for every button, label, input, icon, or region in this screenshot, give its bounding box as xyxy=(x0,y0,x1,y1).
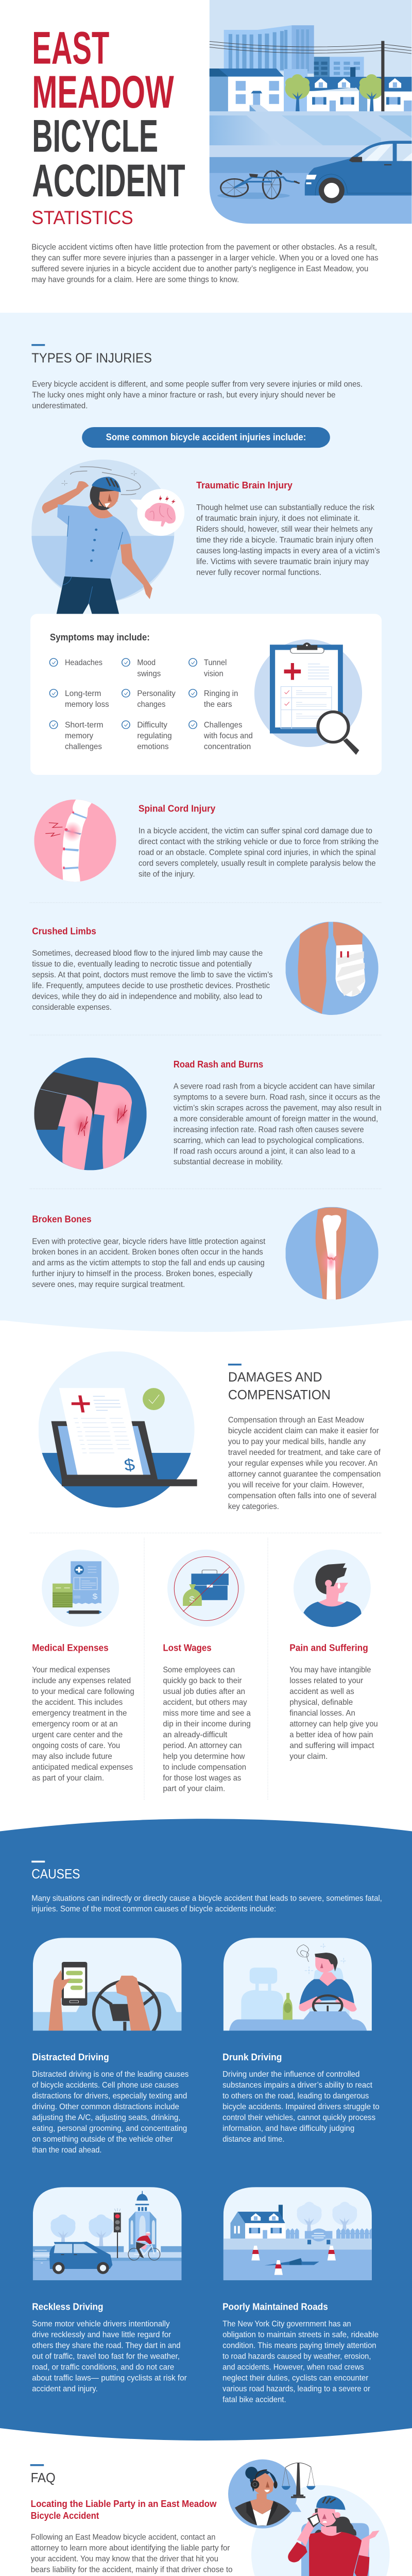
text: traumatic brain injury: Riders should, however, still wear their helmets any xyxy=(196,524,373,534)
text: reckless driving: drive recklessly and have little regard for xyxy=(32,2330,171,2339)
text: lost wages: usual job duties after an xyxy=(163,1687,245,1696)
symptoms list: Ringing in xyxy=(204,689,238,698)
text: lost wages: Lost Wages xyxy=(163,1643,212,1653)
text: broken bones: Even with protective gear, bicycle riders have little protection against xyxy=(32,1236,266,1246)
text: broken bones xyxy=(32,1214,266,1289)
illustration: drunk driving xyxy=(224,1938,372,2030)
text: locating the liable party: your accident. You may know that the driver that hit you xyxy=(31,2554,218,2564)
text: reckless driving: accident and injury. xyxy=(32,2384,98,2393)
illustration: street scene with car and bicycle xyxy=(210,0,411,224)
intro text: causes: injuries. Some of the most common causes of bicycle accidents include: xyxy=(31,1904,276,1913)
text: damages intro: you will receive for your claim. However, xyxy=(228,1480,364,1489)
text: traumatic brain injury: time they ride a bicycle. Traumatic brain injury often xyxy=(196,535,373,545)
text: medical expenses: Medical Expenses xyxy=(32,1643,109,1653)
text: damages intro: Compensation through an East Meadow xyxy=(228,1415,364,1425)
section: compensation categories xyxy=(32,1550,378,1793)
symptoms list: changes xyxy=(137,700,165,709)
text: reckless driving: road, or traffic conditions, and do not care xyxy=(32,2363,174,2371)
text: pain and suffering: your claim. xyxy=(289,1752,328,1761)
text: road rash body: If road rash occurs around a joint, it can also lead to a xyxy=(174,1146,355,1156)
subheading: locating the liable party: Locating the Liable Party in an East Meadow xyxy=(31,2499,217,2510)
text: poorly maintained roads xyxy=(222,2302,379,2404)
text: distracted driving: than the road ahead. xyxy=(32,2145,101,2155)
text: spinal cord injury: site of the injury. xyxy=(139,869,195,878)
text: crushed limbs: Crushed Limbs xyxy=(32,926,96,937)
text: medical expenses: to your medical care following xyxy=(32,1687,134,1696)
illustration: clipboard and magnifier xyxy=(254,639,362,755)
illustration: laptop with medical bill: $ xyxy=(123,1455,136,1475)
text: medical expenses: as part of your claim. xyxy=(32,1773,104,1782)
text: crushed limbs xyxy=(32,926,273,1012)
title: BICYCLE xyxy=(32,111,158,162)
illustration: distracted driving xyxy=(33,1938,181,2031)
text: crushed limbs: considerable expenses. xyxy=(32,1003,112,1012)
section: types of injuries, upper part xyxy=(31,344,380,614)
text: spinal cord injury xyxy=(139,804,379,878)
title xyxy=(32,23,185,206)
text: pain and suffering: and suffering will impact xyxy=(289,1741,374,1750)
text: drunk driving: to others on the road, leading to dangerous xyxy=(222,2091,369,2100)
illustration: cyclist calling attorney xyxy=(228,2460,390,2576)
illustration: laptop with medical bill xyxy=(39,1351,197,1508)
text: distracted driving xyxy=(32,2052,188,2155)
text: road rash body: A severe road rash from a bicycle accident can have similar xyxy=(174,1081,375,1091)
icon: pain and suffering xyxy=(294,1550,371,1627)
heading: causes xyxy=(31,1861,80,1882)
text: lost wages xyxy=(163,1643,251,1793)
section: individual injuries, part 2 xyxy=(32,800,379,1070)
text: spinal cord injury: road or an obstacle. Complete spinal cord injuries, in which the spinal xyxy=(139,848,376,857)
wave: bottom of injuries section xyxy=(0,1319,411,1332)
text: broken bones: and arms as the victim attempts to stop the fall and ends up causing xyxy=(32,1258,265,1267)
heading: types of injuries xyxy=(31,344,152,365)
text: traumatic brain injury: of traumatic brain injury, it does not eliminate it. xyxy=(196,514,360,523)
text: traumatic brain injury: causes long-lasting impacts in every area of a victim’s xyxy=(196,546,380,555)
heading: causes: CAUSES xyxy=(31,1867,80,1882)
text: drunk driving: distance and time. xyxy=(222,2134,285,2144)
text: medical expenses: may also include future xyxy=(32,1752,112,1761)
icon: scales of justice xyxy=(282,2463,316,2498)
text: crushed limbs: sepsis. At that point, doctors must remove the limb to save the victim’s xyxy=(32,970,273,979)
subheading: locating the liable party: Bicycle Accident xyxy=(31,2511,99,2521)
dotted dividers xyxy=(30,903,382,1800)
text: traumatic brain injury: life. Victims with severe traumatic brain injury may xyxy=(196,557,369,566)
text: medical expenses: Your medical expenses xyxy=(32,1665,110,1674)
text: medical expenses: ongoing costs of care. You xyxy=(32,1741,120,1750)
text: lost wages: for those lost wages as xyxy=(163,1773,241,1782)
text: distracted driving: Distracted driving is one of the leading causes xyxy=(32,2070,188,2079)
text: locating the liable party: bears liability for the accident, mainly if that driver chose to xyxy=(31,2566,233,2574)
text: locating the liable party: Following an East Meadow bicycle accident, contact an xyxy=(31,2533,215,2542)
section: causes, lower xyxy=(30,2187,379,2521)
section: individual injuries, part 3 xyxy=(0,1058,411,1511)
text: medical expenses: emergency treatment in the xyxy=(32,1708,127,1718)
text: pain and suffering: losses related to your xyxy=(289,1676,363,1685)
heading: types of injuries: TYPES OF INJURIES xyxy=(31,350,152,365)
text: pain and suffering xyxy=(289,1643,378,1761)
text: pain and suffering: accident as well as xyxy=(289,1687,354,1696)
section background: causes xyxy=(0,1819,412,2441)
text: distracted driving: adjusting the A/C, adjusting seats, drinking, xyxy=(32,2113,181,2122)
symptoms list: memory loss xyxy=(65,700,109,709)
text: spinal cord injury: direct contact with the striking vehicle or due to force from striking the xyxy=(139,837,379,846)
text: distracted driving: on something outside of the vehicle other xyxy=(32,2134,173,2144)
symptoms list: Tunnel xyxy=(204,658,227,667)
symptoms list: emotions xyxy=(137,742,169,751)
text: broken bones: broken bones in an accident. Broken bones often occur in the hands xyxy=(32,1247,263,1257)
text: drunk driving: substances impairs a driver’s ability to react xyxy=(222,2080,372,2090)
icon: medical expenses xyxy=(42,1550,119,1627)
text: drunk driving: Drunk Driving xyxy=(222,2052,282,2063)
speech bubble with brain icon xyxy=(130,489,184,536)
symptoms list: Mood xyxy=(137,658,156,667)
text: crushed limbs: life. Frequently, amputees decide to use prosthetic devices. Prosthetic xyxy=(32,981,270,990)
symptoms list: Difficulty xyxy=(137,720,168,730)
text: medical expenses: emergency room or at an xyxy=(32,1719,118,1728)
symptoms list: the ears xyxy=(204,700,232,709)
text: medical expenses xyxy=(32,1643,134,1782)
heading: damages and compensation: DAMAGES AND xyxy=(228,1369,322,1384)
title: ACCIDENT xyxy=(32,155,185,206)
text: poorly maintained roads: various road hazards, leading to a severe or xyxy=(222,2384,370,2393)
text: poorly maintained roads: obligation to maintain streets in safe, rideable xyxy=(222,2330,379,2339)
text: crushed limbs: devices, while they do aid in independence and mobility, also lead to xyxy=(32,992,262,1001)
text: lost wages: to include compensation xyxy=(163,1762,246,1772)
illustration: road rash on knees xyxy=(34,1058,147,1171)
text: reckless driving: out of traffic, travel too fast for the weather, xyxy=(32,2352,180,2361)
text: spinal cord injury: In a bicycle accident, the victim can suffer spinal cord damage due to xyxy=(139,826,372,835)
text: damages intro: bicycle accident claim can make it easier for xyxy=(228,1426,379,1435)
text: distracted driving: driving. Other common distractions include xyxy=(32,2102,179,2111)
symptoms list: Personality xyxy=(137,689,176,698)
text: road rash body: substantial decrease in mobility. xyxy=(174,1157,283,1166)
text: drunk driving: control their vehicles, cannot quickly process xyxy=(222,2113,375,2122)
text: pain and suffering: physical, definable xyxy=(289,1698,353,1707)
text: medical expenses: the accident. This includes xyxy=(32,1698,123,1707)
icon: lost wages: $ xyxy=(189,1595,195,1604)
subheading: locating the liable party xyxy=(31,2499,217,2521)
intro text: types of injuries: The lucky ones might only have a minor fracture or rash, but every injury should never be xyxy=(32,390,336,399)
text: poorly maintained roads: neglect their duties, cyclists can encounter xyxy=(222,2374,369,2382)
symptoms list: vision xyxy=(204,669,224,678)
text: pain and suffering: attorney can help give you xyxy=(289,1719,378,1728)
text: lost wages: an already-difficult xyxy=(163,1730,228,1739)
section: FAQ body and closing xyxy=(31,2534,232,2574)
text: drunk driving xyxy=(222,2052,380,2144)
text: road rash body: a more considerable amount of foreign matter in the wound, xyxy=(174,1114,378,1123)
text: damages intro: travel needed for treatment, and take care of xyxy=(228,1448,381,1457)
text: drunk driving: Driving under the influence of controlled xyxy=(222,2070,359,2079)
text: traumatic brain injury xyxy=(196,480,380,577)
text: lost wages: help you determine how xyxy=(163,1752,245,1761)
illustration: spine xyxy=(34,800,116,882)
text: distracted driving: distractions for drivers, especially texting and xyxy=(32,2091,187,2100)
symptoms list: Long-term xyxy=(65,689,101,698)
text: damages intro: attorney cannot guarantee the compensation xyxy=(228,1469,381,1479)
text: lost wages: Some employees can xyxy=(163,1665,235,1674)
heading: damages and compensation xyxy=(228,1364,331,1402)
text: medical expenses: urgent care center and the xyxy=(32,1730,123,1739)
check icons xyxy=(49,658,197,728)
text: locating the liable party: attorney to learn more about identifying the liable party for xyxy=(31,2544,230,2553)
heading: damages and compensation: COMPENSATION xyxy=(228,1387,331,1402)
text: lost wages: period. An attorney can xyxy=(163,1741,242,1750)
text: lost wages: quickly go back to their xyxy=(163,1676,242,1685)
text: distracted driving: Distracted Driving xyxy=(32,2052,109,2063)
hero block xyxy=(31,0,411,284)
text: lost wages: part of your claim. xyxy=(163,1784,225,1793)
text: crushed limbs: Sometimes, decreased blood flow to the injured limb may cause the xyxy=(32,948,263,958)
section background: types of injuries xyxy=(0,313,412,1320)
illustration: man with head injury xyxy=(31,460,175,614)
text: damages intro: your regular expenses while you recover. An xyxy=(228,1459,377,1468)
subtitle: STATISTICS xyxy=(31,208,133,229)
symptoms list: with focus and xyxy=(203,731,253,740)
intro paragraph xyxy=(31,242,379,284)
text: road rash body: increasing infection rate. Road rash often causes severe xyxy=(174,1125,364,1134)
speech bubble: attorney with headset xyxy=(228,2460,301,2529)
text: traumatic brain injury: never fully recover normal functions. xyxy=(196,568,321,577)
title: EAST xyxy=(32,23,109,74)
text: lost wages: dip in their income during xyxy=(163,1719,251,1728)
text: broken bones: further injury to himself in the process. Broken bones, especially xyxy=(32,1269,253,1278)
heading: FAQ: FAQ xyxy=(31,2470,56,2485)
text: poorly maintained roads: to road hazards caused by weather, erosion, xyxy=(222,2352,371,2361)
text: damages intro: compensation often falls into one of several xyxy=(228,1491,376,1500)
symptoms list: Short-term xyxy=(65,720,104,730)
symptoms list: memory xyxy=(65,731,94,740)
illustration: poorly maintained roads xyxy=(224,2187,372,2281)
text: poorly maintained roads: fatal bike accident. xyxy=(222,2395,286,2404)
text: reckless driving: about traffic laws— putting cyclists at risk for xyxy=(32,2374,187,2382)
text: traumatic brain injury: Though helmet use can substantially reduce the risk xyxy=(196,503,375,512)
panel: symptoms card xyxy=(30,614,382,775)
text: spinal cord injury: Spinal Cord Injury xyxy=(139,804,215,814)
symptoms list: challenges xyxy=(65,742,102,751)
text: pain and suffering: financial losses. An xyxy=(289,1708,355,1718)
text: poorly maintained roads: and accidents. However, when road crews xyxy=(222,2363,364,2371)
symptoms list: Headaches xyxy=(65,658,102,667)
symptoms list: swings xyxy=(137,669,161,678)
icon: lost wages xyxy=(167,1550,245,1627)
heading: FAQ xyxy=(30,2464,56,2485)
callout button: Some common bicycle accident injuries include: xyxy=(106,432,306,443)
text: drunk driving: information, and have difficulty judging xyxy=(222,2124,354,2133)
text: pain and suffering: You may have intangible xyxy=(289,1665,371,1674)
intro text: types of injuries xyxy=(32,379,363,410)
text: road rash body xyxy=(174,1081,382,1166)
intro text: types of injuries: underestimated. xyxy=(32,401,88,410)
text: broken bones: severe ones, may require surgical treatment. xyxy=(32,1280,185,1289)
text: road rash body: scarring, which can lead to psychological complications. xyxy=(174,1136,364,1145)
intro paragraph: may have grounds for a claim. Here are some things to know. xyxy=(31,275,239,284)
text: crushed limbs: tissue to die, eventually leading to necrotic tissue and potentially xyxy=(32,959,252,969)
text: reckless driving: Some motor vehicle drivers intentionally xyxy=(32,2319,170,2328)
text: reckless driving: others they share the road. They dart in and xyxy=(32,2341,181,2350)
section: causes, upper xyxy=(31,1861,382,2155)
text: reckless driving xyxy=(32,2302,187,2393)
text: damages intro: key categories. xyxy=(228,1502,279,1511)
symptoms list: concentration xyxy=(204,742,251,751)
text: damages intro xyxy=(228,1415,381,1511)
symptoms list xyxy=(65,658,253,751)
text: pain and suffering: Pain and Suffering xyxy=(289,1643,368,1653)
text: distracted driving: eating, personal grooming, and concentrating xyxy=(32,2124,187,2133)
heading: symptoms: Symptoms may include: xyxy=(50,632,150,642)
text: poorly maintained roads: condition. This means paying timely attention xyxy=(222,2341,376,2350)
text: distracted driving: of bicycle accidents. Cell phone use causes xyxy=(32,2080,179,2090)
text: reckless driving: Reckless Driving xyxy=(32,2302,104,2312)
text: traumatic brain injury: Traumatic Brain Injury xyxy=(196,480,293,491)
text: medical expenses: include any expenses related xyxy=(32,1676,131,1685)
symptoms list: Challenges xyxy=(204,720,242,730)
text: drunk driving: bicycle accidents. Impaired drivers struggle to xyxy=(222,2102,380,2111)
title: MEADOW xyxy=(32,66,174,117)
illustration: broken bone xyxy=(286,1207,379,1300)
icon: medical expenses: $ xyxy=(93,1592,97,1601)
illustration: reckless driving xyxy=(33,2187,182,2281)
text: broken bones: Broken Bones xyxy=(32,1214,92,1225)
intro text: causes xyxy=(31,1893,382,1913)
symptoms list: regulating xyxy=(137,731,172,740)
text: locating the liable party xyxy=(31,2533,233,2576)
illustration: bandaged limb xyxy=(286,922,379,1015)
text: medical expenses: anticipated medical expenses xyxy=(32,1762,133,1772)
text: lost wages: miss more time and see a xyxy=(163,1708,251,1718)
heading: road rash and burns: Road Rash and Burns xyxy=(174,1059,263,1070)
text: pain and suffering: a better idea of how pain xyxy=(289,1730,373,1739)
text: lost wages: accident, but others may xyxy=(163,1698,247,1707)
callout button xyxy=(82,427,330,448)
text: poorly maintained roads: The New York City government has an xyxy=(222,2319,351,2328)
text: damages intro: you to pay your medical bills, handle any xyxy=(228,1437,366,1446)
text: poorly maintained roads: Poorly Maintained Roads xyxy=(222,2302,328,2312)
